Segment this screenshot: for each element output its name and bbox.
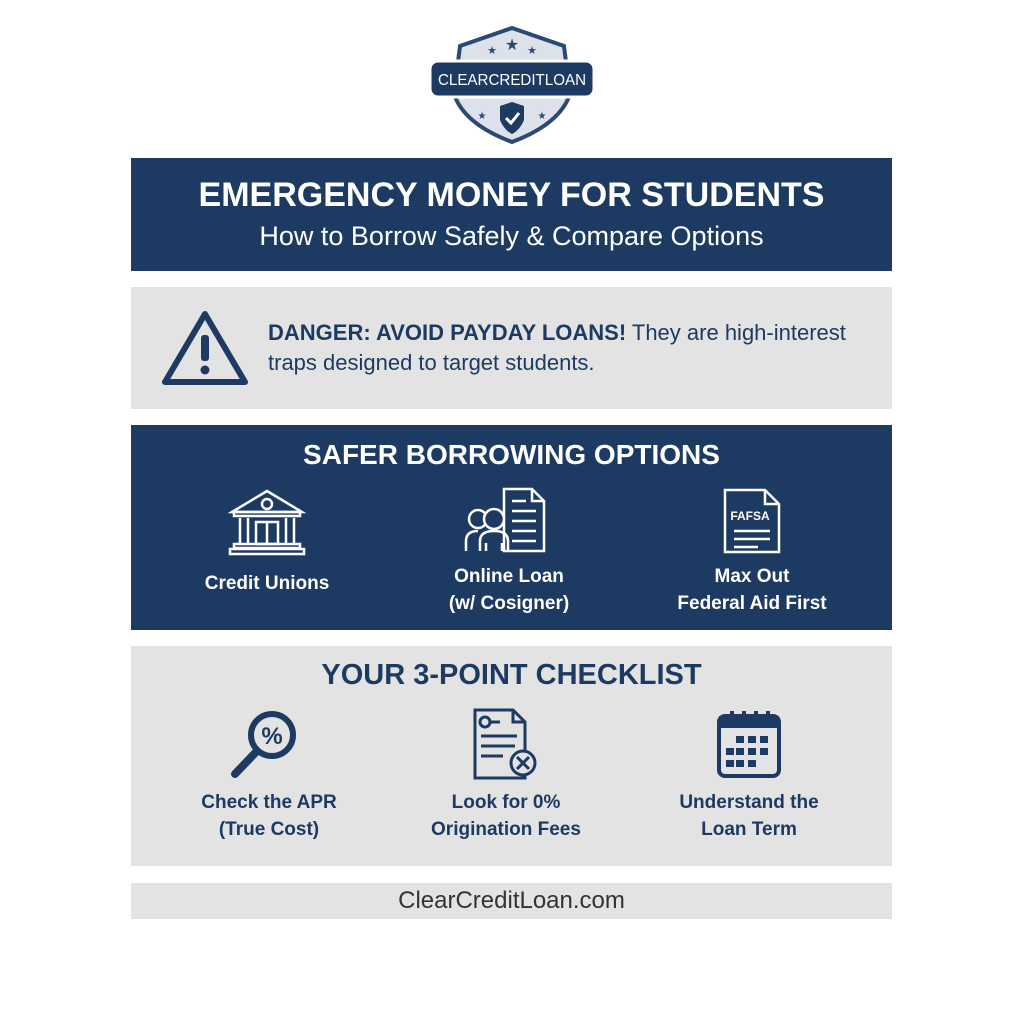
logo badge: ★ [538,111,547,122]
icon: warning triangle [162,311,248,385]
heading: YOUR 3-POINT CHECKLIST [321,659,702,691]
footer url: ClearCreditLoan.com [398,887,625,914]
logo badge: CLEARCREDITLOAN [438,72,586,89]
panel: safer borrowing options [131,425,892,630]
header panel [131,158,892,271]
icon: document with x [474,708,536,780]
label: online loan [449,566,569,614]
icon: magnifier percent: % [261,723,283,750]
label: origination fees: Look for 0% [452,792,560,813]
label: loan term: Understand the [679,792,819,813]
logo badge: ★ [505,37,519,54]
icon: FAFSA document [724,488,780,554]
label: loan term [679,792,819,840]
icon: calendar [717,711,781,778]
icon: magnifier percent [231,711,296,778]
icon: people with document [464,488,546,552]
label: origination fees: Origination Fees [431,819,581,840]
icon: FAFSA document: FAFSA [730,509,770,523]
title: EMERGENCY MONEY FOR STUDENTS [199,176,824,214]
label: online loan: Online Loan [454,566,564,587]
label: APR: (True Cost) [219,819,319,840]
panel: danger warning [131,287,892,409]
icon: bank [228,490,306,556]
logo badge [432,26,592,144]
label: federal aid: Max Out [715,566,789,587]
warning text: DANGER: AVOID PAYDAY LOANS! They are high-interest traps designed to target students. [268,320,846,375]
logo badge: ★ [487,45,497,57]
label: federal aid: Federal Aid First [677,593,827,614]
label: federal aid [677,566,827,614]
label: APR: Check the APR [201,792,337,813]
heading: SAFER BORROWING OPTIONS [303,439,720,470]
logo badge: ★ [478,111,487,122]
logo badge: ★ [527,45,537,57]
footer [131,883,892,919]
label: loan term: Loan Term [701,819,797,840]
label: credit unions: Credit Unions [205,573,329,594]
label: online loan: (w/ Cosigner) [449,593,569,614]
subtitle: How to Borrow Safely & Compare Options [259,221,764,251]
label: APR [201,792,337,840]
panel: checklist [131,646,892,866]
label: origination fees [431,792,581,840]
